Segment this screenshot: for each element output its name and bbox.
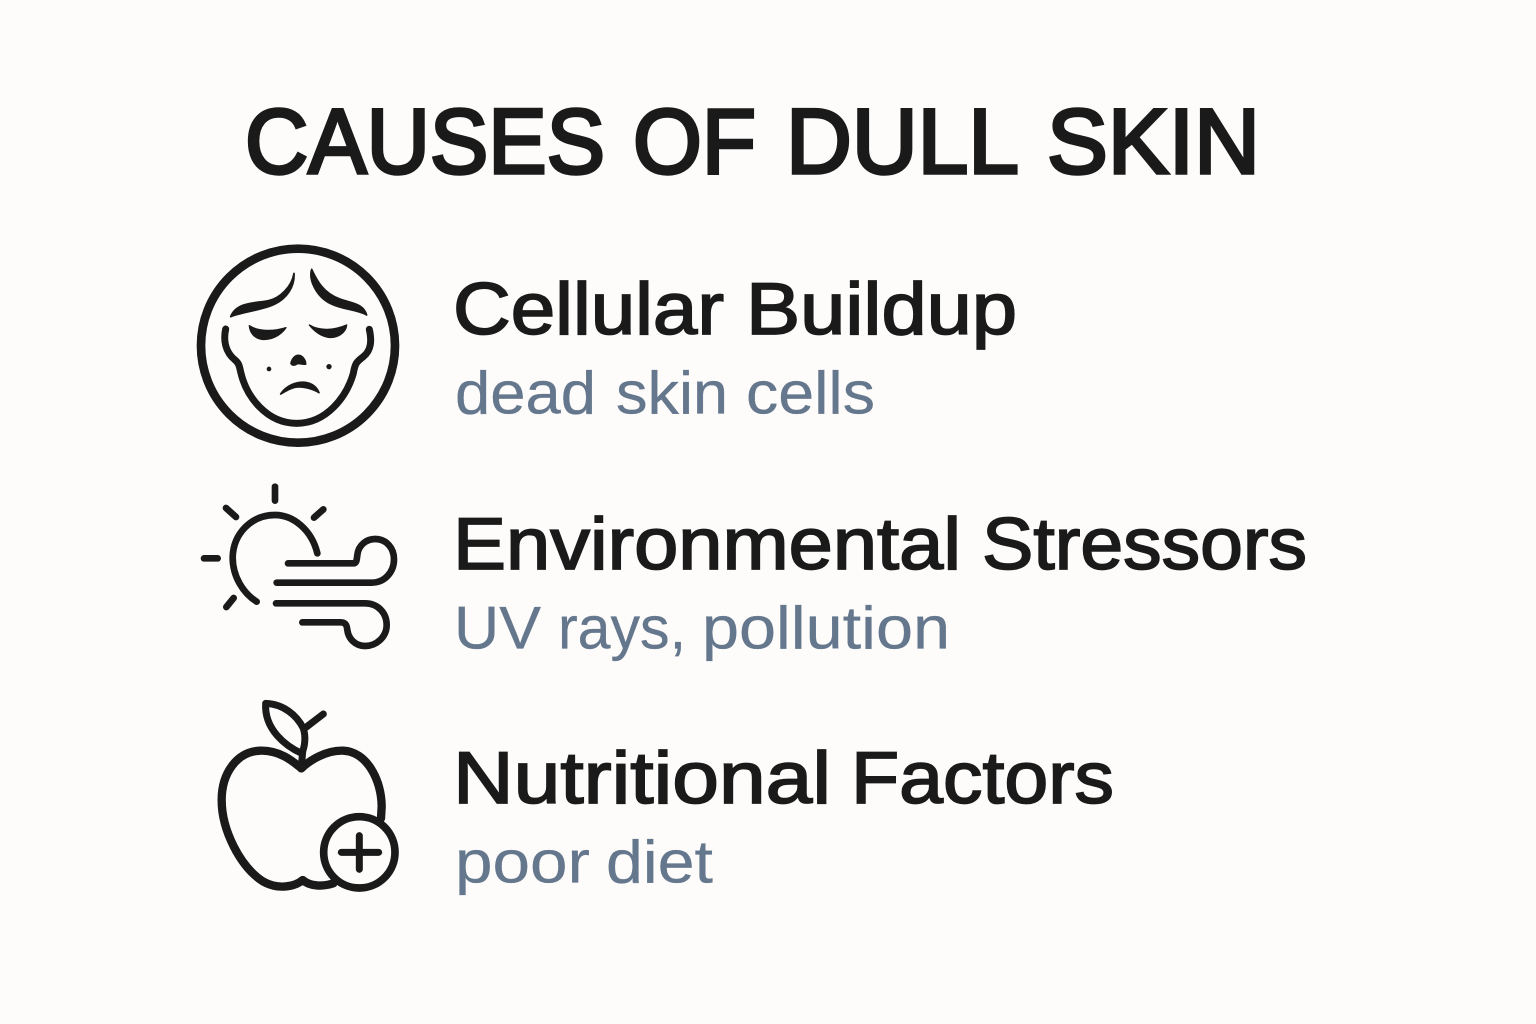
title: OF (633, 91, 756, 193)
subtext: poor diet: poor (455, 828, 590, 896)
subtext: dead skin cells: cells (746, 360, 875, 426)
subtext: uv rays, pollution: UV (454, 594, 541, 662)
heading: environmental stressors: Environmental (453, 504, 961, 585)
row: environmental stressors (204, 487, 1307, 662)
row: cellular buildup (201, 249, 1017, 443)
heading: cellular buildup: Cellular (453, 269, 724, 350)
subtext: uv rays, pollution (454, 594, 950, 662)
heading: nutritional factors (453, 738, 1114, 819)
subtext: dead skin cells: dead (455, 360, 596, 426)
subtext: dead skin cells: skin (616, 360, 728, 426)
icon: apple with plus (222, 703, 395, 888)
subtext: uv rays, pollution: pollution (702, 594, 950, 662)
subtext: uv rays, pollution: rays, (558, 594, 686, 662)
title: DULL (786, 91, 1019, 193)
subtext: dead skin cells (455, 360, 875, 426)
icon: sun and wind (204, 487, 394, 646)
title: CAUSES (245, 91, 605, 193)
heading: environmental stressors (453, 504, 1307, 585)
title: SKIN (1047, 91, 1260, 193)
row: nutritional factors (222, 703, 1114, 896)
subtext: poor diet (455, 828, 713, 896)
heading: cellular buildup: Buildup (746, 269, 1017, 350)
heading: nutritional factors: Nutritional (453, 738, 831, 819)
heading: nutritional factors: Factors (851, 738, 1114, 819)
heading: environmental stressors: Stressors (982, 504, 1307, 585)
heading: cellular buildup (453, 269, 1017, 350)
title (245, 91, 1260, 193)
icon: tired face (201, 249, 395, 443)
subtext: poor diet: diet (606, 828, 713, 896)
